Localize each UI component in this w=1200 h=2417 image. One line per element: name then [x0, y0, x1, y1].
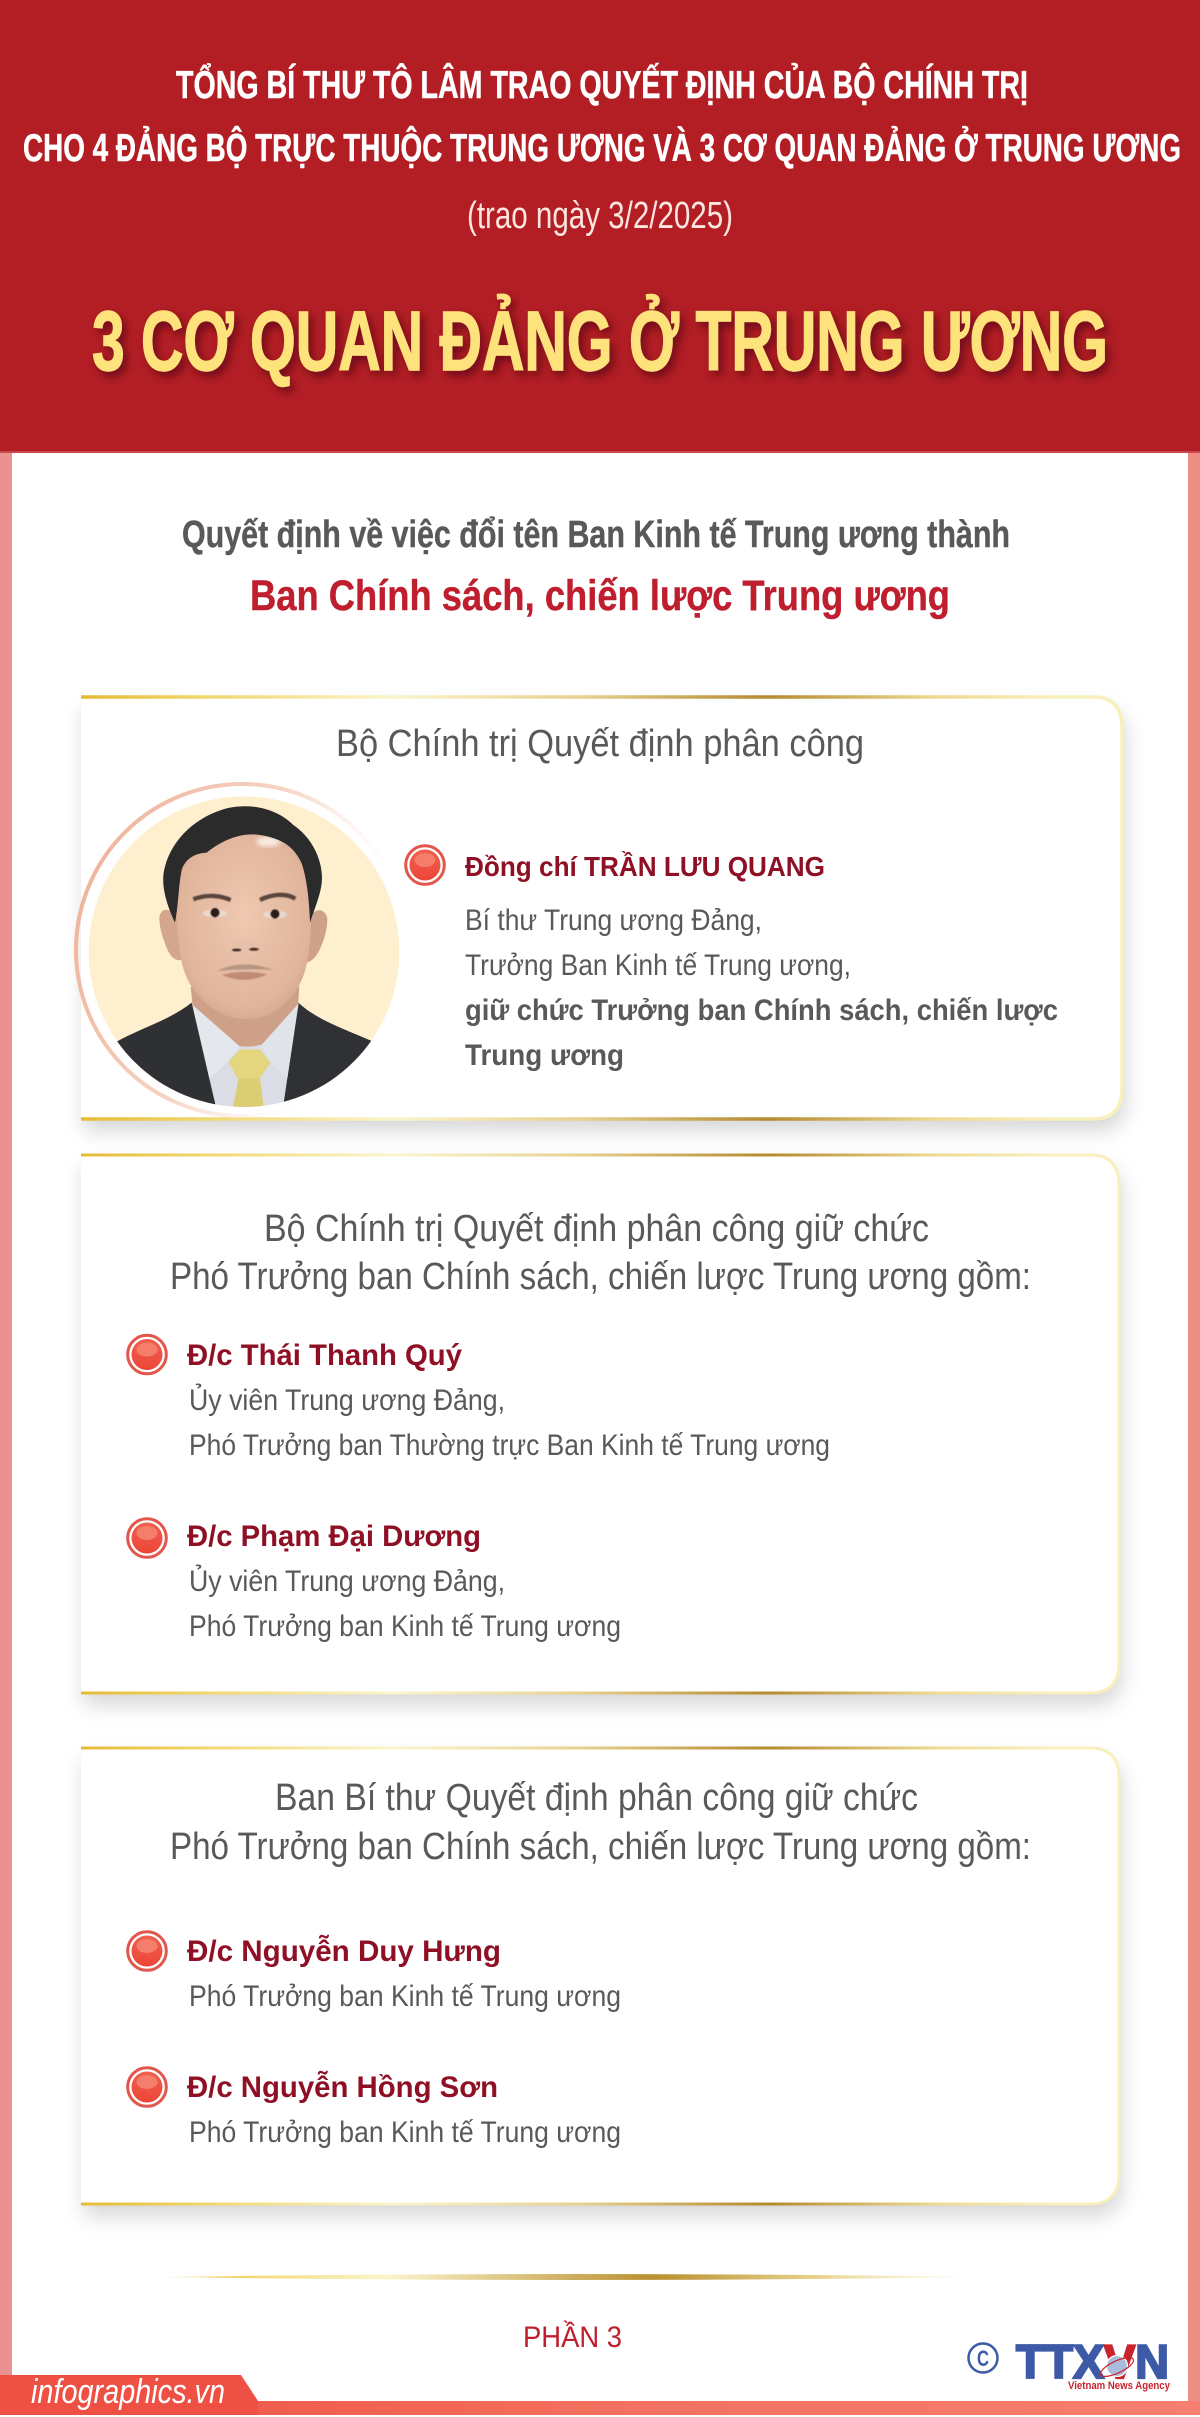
name: Đ/c Nguyễn Hồng Sơn [187, 2070, 498, 2104]
new department name: Ban Chính sách, chiến lược Trung ương [250, 572, 950, 620]
name: Đ/c Thái Thanh Quý [187, 1339, 462, 1372]
name: Đồng chí TRẦN LƯU QUANG [465, 851, 825, 882]
subtitle: Quyết định về việc đổi tên Ban Kinh tế Trung ương thành [182, 514, 1010, 556]
logo: TTXVN Vietnam News Agency: C [977, 2346, 989, 2371]
name: Đ/c Phạm Đại Dương [187, 1520, 481, 1553]
role: Phó Trưởng ban Kinh tế Trung ương [189, 2116, 621, 2149]
bullet icon [406, 846, 444, 884]
role: Phó Trưởng ban Kinh tế Trung ương [189, 1980, 621, 2013]
bullet icon [128, 2068, 166, 2106]
panel: deputies appointed by Secretariat [81, 1748, 1119, 2204]
panel heading: Bộ Chính trị Quyết định phân công [336, 723, 864, 765]
new role: giữ chức Trưởng ban Chính sách, chiến lược [465, 994, 1058, 1027]
bullet icon [128, 1932, 166, 1970]
logo: TTXVN Vietnam News Agency: TTXVN [1016, 2335, 1169, 2388]
name: Đ/c Nguyễn Duy Hưng [187, 1934, 501, 1968]
panel heading: Phó Trưởng ban Chính sách, chiến lược Trung ương gồm: [170, 1826, 1031, 1868]
role: Phó Trưởng ban Thường trực Ban Kinh tế Trung ương [189, 1429, 830, 1462]
panel heading: Phó Trưởng ban Chính sách, chiến lược Trung ương gồm: [170, 1256, 1031, 1298]
panel: head of commission [76, 697, 1123, 1119]
header banner [0, 0, 1200, 453]
role: Ủy viên Trung ương Đảng, [189, 1564, 505, 1598]
panel heading: Ban Bí thư Quyết định phân công giữ chức [275, 1777, 918, 1819]
panel heading: Bộ Chính trị Quyết định phân công giữ chức [264, 1208, 929, 1250]
new role continued: Trung ương [465, 1039, 624, 1072]
date note: (trao ngày 3/2/2025) [467, 195, 733, 237]
role: Ủy viên Trung ương Đảng, [189, 1383, 505, 1417]
portrait: Trần Lưu Quang [76, 784, 408, 1116]
bullet icon [128, 1335, 166, 1374]
role line 1: Bí thư Trung ương Đảng, [465, 904, 762, 937]
role line 2: Trưởng Ban Kinh tế Trung ương, [465, 949, 851, 982]
role: Phó Trưởng ban Kinh tế Trung ương [189, 1610, 621, 1643]
bullet icon [128, 1519, 166, 1557]
section heading [182, 514, 1010, 620]
footer band with site name [0, 2373, 1200, 2415]
panel heading [170, 1208, 1031, 1298]
panel heading [170, 1777, 1031, 1868]
part label: PHẦN 3 [523, 2320, 622, 2354]
role [189, 1383, 830, 1462]
logo: TTXVN Vietnam News Agency: Vietnam News Agency [1068, 2380, 1171, 2392]
panel: deputies appointed by Politburo [81, 1155, 1119, 1693]
role [189, 1564, 621, 1643]
site name: infographics.vn [31, 2373, 225, 2411]
